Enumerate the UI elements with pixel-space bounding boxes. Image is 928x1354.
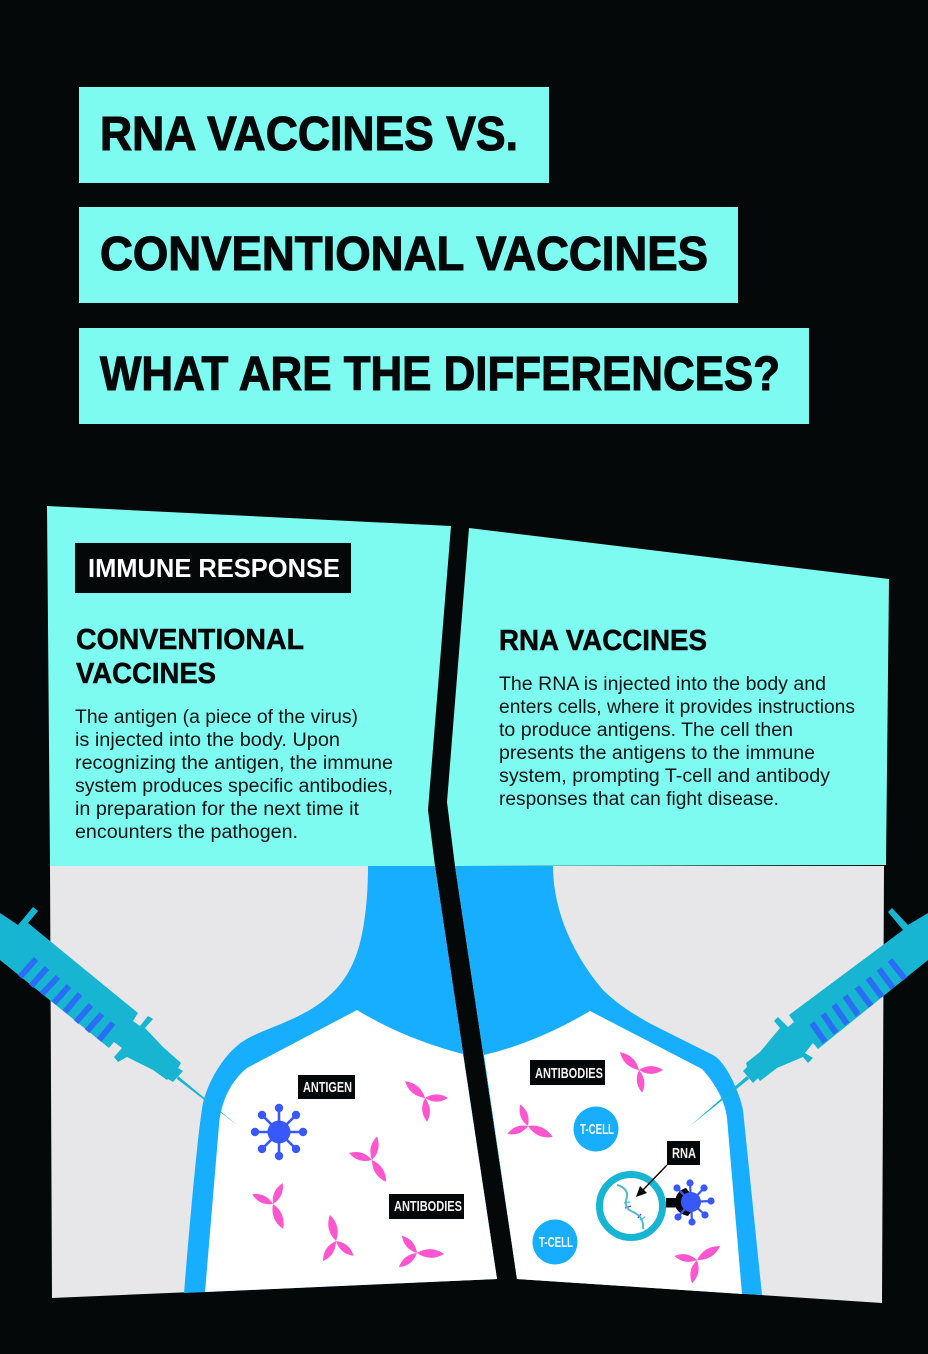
label: rna: RNA — [672, 1145, 696, 1162]
label: antibodies right — [530, 1060, 605, 1085]
icon: syringe right — [690, 908, 928, 1126]
text block: conventional vaccines description: system produces specific antibodies, — [75, 776, 393, 797]
heading: conventional vaccines: CONVENTIONAL — [76, 624, 304, 656]
title line 2 — [79, 207, 738, 303]
text block: conventional vaccines description: The antigen (a piece of the virus) — [75, 707, 358, 728]
text block: rna vaccines description: enters cells, where it provides instructions — [499, 697, 855, 718]
panel: conventional vaccine illustration — [0, 866, 497, 1298]
panel: conventional vaccines text — [47, 506, 451, 866]
panel: rna vaccines text — [447, 528, 889, 866]
icon: t-cell upper — [574, 1106, 618, 1152]
body interior: right — [484, 1011, 742, 1294]
body interior: left — [205, 1010, 497, 1292]
icon: t-cell upper: T-CELL — [580, 1121, 614, 1138]
body outline: right — [455, 866, 762, 1295]
icon: antibodies left group — [251, 1078, 448, 1270]
panel: rna vaccine illustration — [455, 866, 928, 1303]
text block: rna vaccines description — [499, 674, 855, 810]
icon: t-cell lower — [532, 1220, 578, 1264]
title line 1 — [79, 87, 549, 183]
text block: rna vaccines description: to produce antigens. The cell then — [499, 720, 793, 741]
label: antigen: ANTIGEN — [303, 1079, 352, 1096]
text block: conventional vaccines description: recognizing the antigen, the immune — [75, 753, 393, 774]
heading: immune response: IMMUNE RESPONSE — [88, 553, 340, 583]
icon: antibodies right group — [506, 1049, 722, 1284]
text block: conventional vaccines description — [75, 707, 393, 843]
label: antigen — [298, 1075, 355, 1099]
icon: antigen virus — [251, 1104, 307, 1160]
text block: rna vaccines description: system, prompting T-cell and antibody — [499, 766, 831, 787]
text block: conventional vaccines description: encounters the pathogen. — [75, 822, 298, 843]
text block: rna vaccines description: responses that can fight disease. — [499, 789, 779, 810]
label: antibodies right: ANTIBODIES — [535, 1065, 603, 1082]
label: rna — [667, 1141, 700, 1165]
text block: conventional vaccines description: is injected into the body. Upon — [75, 730, 340, 751]
arrow: rna label to strand — [636, 1165, 667, 1197]
title line 3: WHAT ARE THE DIFFERENCES? — [100, 348, 780, 401]
icon: cell with rna strand — [600, 1174, 662, 1238]
label: antibodies left — [389, 1194, 464, 1219]
icon: receptor bound to antigen — [666, 1179, 715, 1226]
text block: rna vaccines description: The RNA is injected into the body and — [499, 674, 826, 695]
title line 3 — [79, 328, 809, 424]
icon: syringe left — [0, 907, 237, 1125]
heading: conventional vaccines — [76, 624, 304, 690]
heading: immune response — [75, 543, 351, 593]
icon: t-cell lower: T-CELL — [539, 1234, 573, 1251]
text block: conventional vaccines description: in preparation for the next time it — [75, 799, 360, 820]
label: antibodies left: ANTIBODIES — [394, 1198, 462, 1215]
title line 2: CONVENTIONAL VACCINES — [100, 228, 708, 281]
text block: rna vaccines description: presents the antigens to the immune — [499, 743, 815, 764]
heading: conventional vaccines: VACCINES — [76, 658, 216, 690]
title line 1: RNA VACCINES VS. — [100, 108, 518, 161]
heading: rna vaccines: RNA VACCINES — [499, 625, 707, 657]
body outline: left — [184, 866, 497, 1293]
